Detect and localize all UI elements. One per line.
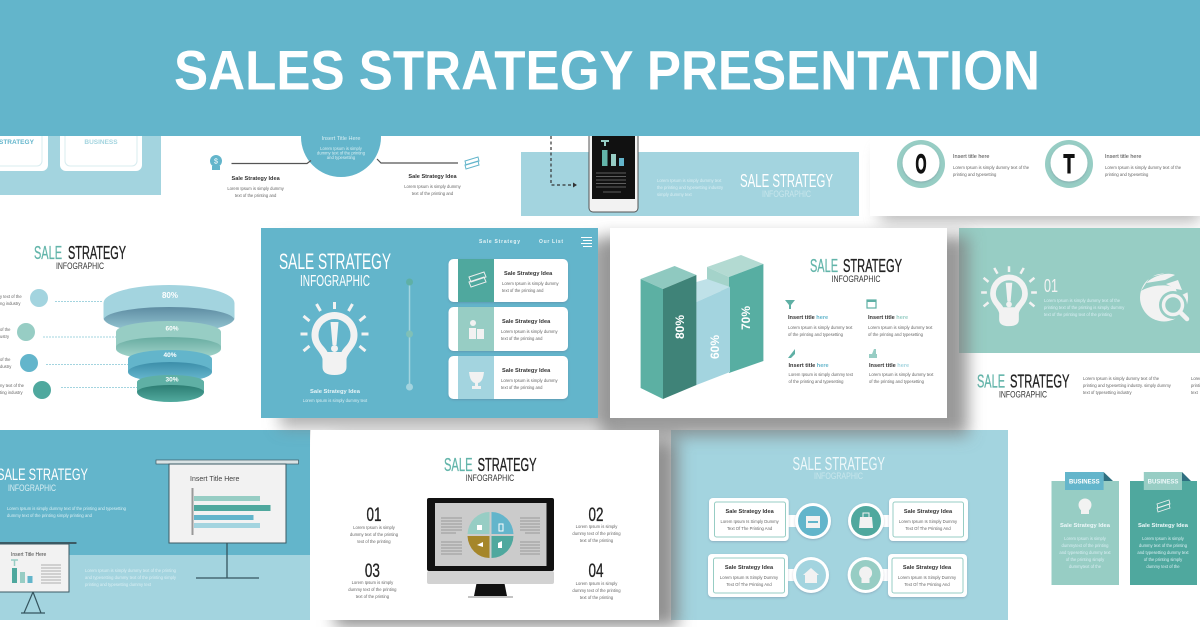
card: idea 1: Sale Strategy Idea — [504, 271, 553, 277]
panel: top-middle circle diagram: Lorem Ipsum is simply — [320, 146, 363, 151]
panel: presentation boards slide: and typesetting dummy text of the printing simply — [85, 575, 177, 580]
panel: green bulb and globe slide — [959, 228, 1200, 353]
panel: business card one: dummytext of the printing — [1061, 543, 1109, 548]
numbered items: 01 — [366, 505, 382, 526]
card with shop icon: Sale Strategy Idea — [725, 509, 775, 515]
soft panel shadows cast on the slides behind — [280, 236, 968, 627]
panel: connected cards slide: INFOGRAPHIC — [814, 471, 863, 482]
panel: presentation boards slide — [0, 430, 310, 620]
panel: business card one: Sale Strategy Idea — [1060, 523, 1111, 529]
panel: centre lightbulb slide — [261, 228, 598, 418]
card with shop icon: Lorem Ipsum Is Simply Dummy — [721, 519, 780, 524]
panel: monitor slide: STRATEGY — [478, 455, 537, 475]
panel: top-middle circle diagram: text of the printing and — [235, 193, 277, 198]
card with bag icon — [848, 498, 968, 541]
icons and item text: Lorem Ipsum is simply dummy text — [788, 372, 854, 377]
panel: phone slide: INFOGRAPHIC — [762, 189, 811, 200]
icons and item text: of the printing and typesetting — [788, 379, 844, 384]
panel: connected cards slide: SALE STRATEGY — [792, 454, 885, 474]
panel: funnel slide — [0, 243, 234, 402]
panel: business card one: Lorem Ipsum is simply — [1064, 536, 1107, 541]
panel: top-middle circle diagram: Insert Title Here — [322, 136, 360, 142]
panel: top-middle circle diagram: Lorem Ipsum is simply dummy — [227, 186, 285, 191]
panel: top-left business cards — [0, 125, 161, 195]
panel: phone slide: Lorem Ipsum is simply dummy text — [657, 178, 722, 183]
panel: monitor slide — [311, 430, 659, 620]
presentation board large — [156, 460, 298, 578]
panel: top-middle circle diagram — [210, 97, 479, 198]
numbered items: Lorem Ipsum is simply — [353, 525, 396, 530]
panel: business card two: of the printing simply — [1144, 557, 1183, 562]
panel: funnel slide: ng industry — [0, 301, 21, 306]
icons and item text: of the printing and typesetting — [868, 332, 924, 337]
panel: presentation boards slide: SALE STRATEGY — [0, 465, 88, 484]
funnel chart: 80% — [162, 291, 178, 300]
header banner — [0, 0, 1200, 136]
card with shop icon — [709, 498, 831, 541]
panel: strip below green slide: printing and typesetting industry. simply dummy — [1083, 383, 1172, 388]
card with head icon — [848, 554, 967, 597]
card with head icon: Lorem Ipsum Is Simply Dummy — [898, 575, 957, 580]
icon: globe with magnifier — [1140, 271, 1190, 322]
isometric bars: 80% — [673, 315, 687, 339]
icon: lightbulb — [300, 302, 368, 375]
numbered items: dummy text of the printing — [572, 588, 621, 593]
card: idea 2: text of the printing and — [501, 336, 543, 341]
icons and item text: Insert title here — [788, 315, 828, 321]
shadow under top-right panel — [880, 150, 1200, 222]
numbered items: dummy text of the printing — [572, 531, 621, 536]
icons and item text: of the printing and typesetting — [869, 379, 925, 384]
panel: business card two: dummy text of the — [1146, 564, 1180, 569]
card: idea 1: Lorem Ipsum is simply dummy — [502, 281, 559, 286]
slider — [406, 278, 413, 390]
icons and item text: Lorem Ipsum is simply dummy text — [869, 372, 934, 377]
panel: business card two: dummy text of the printing — [1139, 543, 1188, 548]
panel: top-right letters: printing and typesetting — [953, 172, 997, 177]
panel: green bulb and globe slide: printing text of the printing is simply dummy — [1044, 305, 1125, 310]
panel: top-middle circle diagram: Lorem Ipsum is simply dummy — [404, 184, 462, 189]
numbered items: 03 — [365, 561, 380, 582]
panel: presentation boards slide: dummy text of the printing simply printing and — [7, 513, 93, 518]
panel: centre lightbulb slide: Lorem Ipsum is simply dummy text — [303, 398, 368, 403]
panel: phone slide: simply dummy text — [657, 192, 693, 197]
panel: strip below green slide: text of typesetting industry — [1083, 390, 1133, 395]
panel: centre lightbulb slide: Our List — [539, 239, 563, 245]
icons and item text: Lorem Ipsum is simply dummy text — [788, 325, 853, 330]
numbered items: Lorem Ipsum is simply — [352, 580, 394, 585]
card with home icon: Text Of The Printing And — [726, 582, 772, 587]
panel: top-right letters: Insert title here — [953, 154, 989, 160]
icon: menu — [581, 238, 592, 246]
panel: funnel slide: of the — [0, 327, 11, 332]
isometric bars: 70% — [739, 306, 753, 330]
card: idea 3: Sale Strategy Idea — [502, 368, 551, 374]
funnel title: SALE — [34, 243, 62, 263]
panel: connected cards slide — [671, 430, 1008, 620]
funnel chart: 30% — [165, 376, 179, 384]
panel: monitor slide: SALE — [444, 455, 472, 475]
panel: business card one: BUSINESS — [1069, 480, 1100, 486]
panel: top-left business cards: BUSINESS — [84, 139, 118, 146]
icons and item text: Insert title here — [869, 363, 909, 369]
panel: business card two: Lorem Ipsum is simply — [1142, 536, 1185, 541]
panel: top-middle circle diagram: Sale Strategy Idea — [231, 176, 281, 182]
panel: top-right letters — [870, 130, 1200, 216]
title: SALES STRATEGY PRESENTATION — [174, 38, 1040, 102]
card: idea 3: text of the printing and — [501, 385, 543, 390]
panel: isometric bar chart slide — [610, 228, 947, 418]
panel: isometric bar chart slide: INFOGRAPHIC — [832, 274, 881, 285]
card with bag icon: Text Of The Printing And — [905, 526, 951, 531]
panel: top-middle circle diagram: Sale Strategy Idea — [408, 174, 457, 180]
panel: business card two: and typesetting dummy text — [1137, 550, 1189, 555]
funnel chart: 40% — [163, 352, 177, 359]
presentation board small — [0, 542, 76, 613]
card with home icon: Lorem Ipsum Is Simply Dummy — [720, 575, 779, 580]
numbered items: Lorem Ipsum is simply — [576, 524, 618, 529]
panel: top-middle circle diagram: $ — [214, 158, 218, 166]
icons and item text: Lorem Ipsum is simply dummy text — [868, 325, 933, 330]
panel: top-right letters: Lorem Ipsum is simply dummy text of the — [1105, 165, 1182, 170]
panel: presentation boards slide: INFOGRAPHIC — [8, 483, 56, 493]
numbered items: text of the printing — [580, 538, 614, 543]
numbered items: text of the printing — [356, 594, 390, 599]
panel: top-left business cards: STRATEGY — [0, 139, 35, 146]
panel: green bulb and globe slide: Lorem Ipsum is simply dummy text of the — [1044, 298, 1121, 303]
card with shop icon: Text Of The Printing And — [727, 526, 773, 531]
card with bag icon: Sale Strategy Idea — [904, 509, 953, 515]
panel: business card one: and typesetting dummy text — [1059, 550, 1111, 555]
icons and item text: of the printing and typesetting — [788, 332, 844, 337]
icons and item text: Insert title here — [868, 315, 908, 321]
panel: phone slide: the printing and typesetting industry — [657, 185, 724, 190]
panel: strip below green slide: STRATEGY — [1010, 372, 1070, 392]
panel: strip below green slide: Lorem Ipsum is simply dummy text of the — [1083, 376, 1160, 381]
panel: business card two — [1130, 472, 1197, 585]
panel: monitor slide: INFOGRAPHIC — [466, 473, 514, 484]
panel: business card two: BUSINESS — [1148, 480, 1178, 486]
panel: business card one: dummytext of the — [1069, 564, 1102, 569]
icons and item text — [785, 300, 934, 384]
panel: centre lightbulb slide: Sale Strategy Idea — [310, 389, 361, 395]
panel: strip below green slide: SALE — [977, 372, 1005, 392]
panel: centre lightbulb slide: Sale Strategy — [479, 239, 520, 245]
panel: funnel slide: of the — [0, 357, 11, 362]
panel: top-right letters: Insert title here — [1105, 154, 1141, 160]
panel: top-right letters: Lorem Ipsum is simply dummy text of the — [953, 165, 1030, 170]
panel: business card two: Sale Strategy Idea — [1138, 523, 1189, 529]
numbered items: 04 — [588, 561, 604, 582]
panel: top-right letters: T — [1064, 149, 1075, 179]
panel: strip below green slide: INFOGRAPHIC — [999, 390, 1047, 400]
panel: funnel slide: dustry — [0, 364, 12, 369]
panel: centre lightbulb slide: SALE STRATEGY — [279, 249, 391, 274]
panel: phone slide — [521, 125, 859, 216]
panel: strip below green slide — [959, 353, 1200, 413]
isometric bars — [641, 255, 763, 399]
card with bag icon: Lorem Ipsum Is Simply Dummy — [899, 519, 958, 524]
funnel chart — [104, 285, 234, 402]
funnel title — [34, 243, 126, 272]
card with head icon: Text Of The Printing And — [904, 582, 950, 587]
panel: presentation boards slide: Lorem Ipsum is simply dummy text of the printing — [85, 568, 177, 573]
panel: funnel slide: ny text of the — [0, 383, 25, 388]
presentation board small: Insert Title Here — [11, 552, 47, 558]
numbered items: Lorem Ipsum is simply — [576, 581, 618, 586]
icon: lightbulb small — [981, 266, 1037, 326]
numbered items: text of the printing — [580, 595, 614, 600]
panel: top-middle circle diagram: dummy text of the printing — [317, 150, 366, 156]
panel: funnel slide: y text of the — [0, 294, 22, 299]
numbered items: dummy text of the printing — [348, 587, 397, 592]
panel: isometric bar chart slide: SALE — [810, 256, 838, 276]
card: idea 2: Sale Strategy Idea — [502, 319, 551, 325]
numbered items: dummy text of the printing — [350, 532, 399, 537]
card: idea 2: Lorem Ipsum is simply dummy — [501, 329, 558, 334]
panel: top-right letters: printing and typesetting — [1105, 172, 1149, 177]
isometric bars: 60% — [708, 335, 722, 359]
panel: phone slide: SALE STRATEGY — [740, 171, 833, 191]
panel: isometric bar chart slide: STRATEGY — [843, 256, 902, 276]
panel: top-middle circle diagram: text of the printing and — [412, 191, 454, 196]
panel: top-middle circle diagram: and typesetting — [327, 155, 356, 160]
numbered items: text of the printing — [357, 539, 391, 544]
card: idea 2 — [448, 307, 568, 351]
panel: funnel slide: ustry — [0, 334, 10, 339]
panel: business card one: of the printing simply — [1066, 557, 1105, 562]
panel: business card one — [1052, 472, 1119, 585]
panel: presentation boards slide: printing and typesetting dummy text — [85, 582, 152, 587]
panel: top-right letters: O — [916, 149, 926, 179]
panel: funnel slide: ting industry — [0, 390, 23, 395]
card: idea 3 — [448, 356, 568, 399]
numbered items: 02 — [588, 505, 604, 526]
card: idea 1: text of the printing and — [502, 288, 544, 293]
numbered items — [348, 505, 621, 600]
panel: green bulb and globe slide: 01 — [1044, 276, 1058, 296]
card with home icon — [708, 554, 829, 597]
card: idea 3: Lorem Ipsum is simply dummy — [501, 378, 558, 383]
panel: green bulb and globe slide: text of the printing text of the printing — [1044, 312, 1112, 317]
funnel title: STRATEGY — [68, 243, 126, 263]
panel: centre lightbulb slide: INFOGRAPHIC — [300, 273, 370, 290]
monitor with pie chart — [427, 498, 554, 597]
panel: strip below green slide: text — [1191, 390, 1199, 395]
funnel title: INFOGRAPHIC — [56, 261, 104, 272]
icons and item text: Insert title here — [788, 363, 829, 369]
card with home icon: Sale Strategy Idea — [725, 565, 774, 571]
panel: presentation boards slide: Lorem Ipsum is simply dummy text of the printing and typesetting — [7, 506, 127, 511]
card: idea 1 — [448, 259, 568, 302]
presentation board large: Insert Title Here — [190, 476, 240, 483]
card with head icon: Sale Strategy Idea — [903, 565, 952, 571]
funnel chart: 60% — [165, 326, 179, 332]
